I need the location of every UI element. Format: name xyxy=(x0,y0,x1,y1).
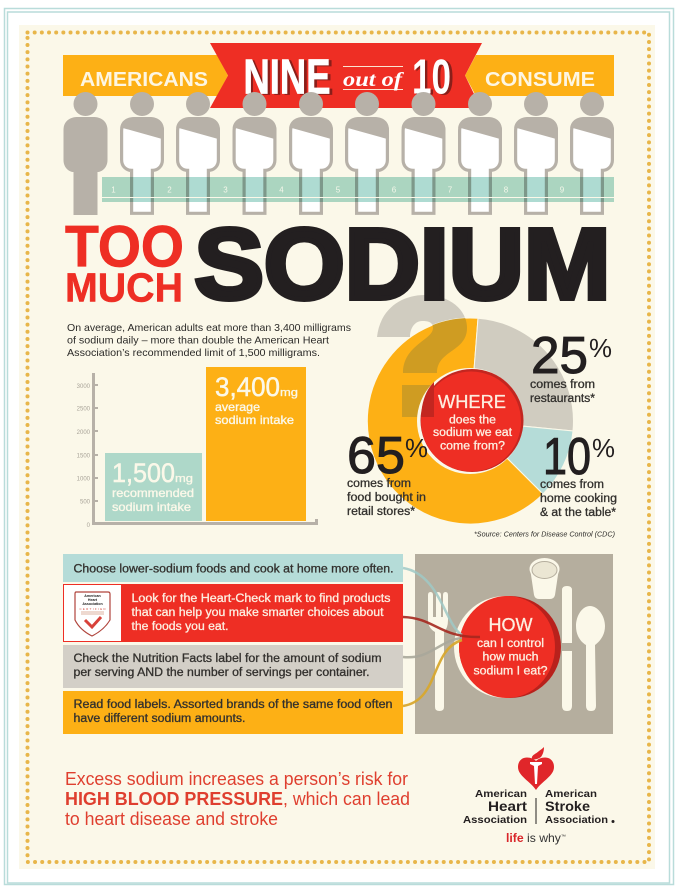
stat: 65 percent: retail stores* xyxy=(347,506,416,518)
banner: nine out of 10: out of xyxy=(343,69,405,91)
icon: spoon xyxy=(576,606,605,711)
warning statement: to heart disease and stroke xyxy=(65,808,278,829)
stat: 25 percent: % xyxy=(589,333,612,363)
bar: recommended: sodium intake xyxy=(112,500,191,514)
bar: average: average xyxy=(215,400,260,414)
number bar 1 to 9: 9 xyxy=(560,186,565,194)
connector lines xyxy=(403,568,480,706)
number bar 1 to 9: 8 xyxy=(504,186,509,194)
stat: 10 percent: comes from xyxy=(540,479,604,491)
center circle: where: does the xyxy=(449,414,496,426)
stat: 25 percent: 25 xyxy=(531,327,588,385)
axis labels: 1000 xyxy=(77,476,91,482)
tip: read food labels: have different sodium amounts. xyxy=(74,713,246,725)
tip: nutrition facts: Check the Nutrition Facts label for the amount of sodium xyxy=(74,653,381,665)
banner: nine out of 10: NINE xyxy=(244,50,330,104)
stat: 10 percent: % xyxy=(592,433,615,463)
stat: 65 percent: food bought in xyxy=(347,492,426,504)
banner: nine out of 10: NINE xyxy=(246,52,334,106)
intro paragraph: of sodium daily – more than double the American Heart xyxy=(67,334,329,346)
logo: american heart and stroke association: ™ xyxy=(561,834,566,840)
banner: nine out of 10: 10 xyxy=(412,50,451,104)
stat: 65 percent: comes from xyxy=(347,478,411,490)
icon: fork xyxy=(428,592,448,711)
warning statement xyxy=(65,768,410,829)
tip: read food labels xyxy=(63,691,403,734)
tip: choose lower sodium xyxy=(63,554,403,582)
banner: consume: CONSUME xyxy=(485,68,595,91)
axis labels: 2000 xyxy=(77,430,91,436)
logo: american heart and stroke association: American xyxy=(475,788,527,800)
center circle: where: come from? xyxy=(440,440,505,452)
tip: nutrition facts xyxy=(63,645,403,688)
logo: american heart and stroke association: American xyxy=(545,788,597,800)
tip: heart-check mark xyxy=(64,584,403,642)
title: too much: TOO xyxy=(65,214,184,280)
how text: sodium I eat? xyxy=(474,666,548,678)
logo: american heart and stroke association: Association xyxy=(463,814,527,826)
logo: american heart and stroke association: Stroke xyxy=(545,798,590,814)
number bar 1 to 9: 2 xyxy=(167,186,172,194)
how text: can I control xyxy=(477,638,544,650)
stat: 65 percent: % xyxy=(405,433,428,463)
number bar 1 to 9: 1 xyxy=(111,186,116,194)
icon: knife xyxy=(561,586,573,711)
banner: Americans: AMERICANS xyxy=(80,68,208,91)
center circle: where: WHERE xyxy=(438,391,506,412)
bar: average xyxy=(206,367,306,521)
icon: heart-check badge: Heart xyxy=(88,598,98,602)
title: too much: MUCH xyxy=(65,264,183,310)
bar: average: sodium intake xyxy=(215,413,294,427)
icon: heart and torch xyxy=(518,747,554,790)
stat: 25 percent: restaurants* xyxy=(530,393,596,405)
tip: choose lower sodium: Choose lower-sodium foods and cook at home more often. xyxy=(74,564,394,576)
tip: nutrition facts: per serving AND the number of servings per container. xyxy=(74,667,370,679)
stat: 10 percent xyxy=(540,428,617,519)
how text: how much xyxy=(482,652,538,664)
axis labels: 0 xyxy=(87,523,91,529)
stat: 65 percent xyxy=(347,427,428,518)
chart axis xyxy=(92,373,318,525)
number bar 1 to 9: 5 xyxy=(336,186,341,194)
slice: home 10 percent xyxy=(470,421,573,494)
center circle: where xyxy=(417,368,524,474)
banner: nine out of 10: 10 xyxy=(414,52,454,106)
stat: 10 percent: 10 xyxy=(543,428,591,486)
axis labels: 2500 xyxy=(77,406,91,412)
how circle xyxy=(454,596,561,698)
axis labels: 500 xyxy=(80,500,91,506)
bar: recommended xyxy=(105,453,202,521)
tip: heart-check mark: that can help you make smarter choices about xyxy=(132,607,384,619)
number bar 1 to 9: 7 xyxy=(448,186,453,194)
number bar 1 to 9 xyxy=(102,177,614,202)
bar: recommended: mg xyxy=(175,473,193,485)
number bar 1 to 9: 4 xyxy=(279,186,284,194)
how text xyxy=(474,614,548,678)
warning statement: HIGH BLOOD PRESSURE xyxy=(65,788,283,809)
intro paragraph: Association’s recommended limit of 1,500 milligrams. xyxy=(67,347,320,359)
title: too much xyxy=(65,214,184,310)
banner: consume xyxy=(465,55,614,96)
question mark overlap xyxy=(402,318,467,417)
icon: heart-check badge: American xyxy=(84,594,101,598)
pictogram: ten people xyxy=(64,92,614,215)
center circle: where: sodium we eat xyxy=(433,427,513,439)
intro paragraph xyxy=(67,322,351,359)
logo: american heart and stroke association: Heart xyxy=(488,798,527,814)
bar: recommended: recommended xyxy=(112,486,194,500)
stat: 10 percent: & at the table* xyxy=(540,507,617,519)
bar: average: 3,400 xyxy=(215,372,280,402)
slice: restaurants 25 percent xyxy=(470,318,573,431)
banner: Americans xyxy=(63,55,228,96)
axis labels: 3000 xyxy=(77,384,91,390)
tip: heart-check mark: the foods you eat. xyxy=(132,621,228,633)
logo: american heart and stroke association: life is why xyxy=(506,831,560,845)
how text: HOW xyxy=(488,614,533,635)
icon: heart-check badge: CERTIFIED xyxy=(80,607,106,611)
slice: retail 65 percent xyxy=(367,318,543,524)
icon: heart-check badge xyxy=(75,592,110,636)
tip: read food labels: Read food labels. Assorted brands of the same food often xyxy=(74,699,392,711)
pie chart xyxy=(368,318,573,524)
tip: heart-check mark: Look for the Heart-Check mark to find products xyxy=(132,593,391,605)
intro paragraph: On average, American adults eat more than 3,400 milligrams xyxy=(67,322,351,334)
question mark behind pie xyxy=(377,295,467,417)
axis labels xyxy=(77,384,91,529)
logo: american heart and stroke association: Association xyxy=(545,814,608,826)
person 1 filled xyxy=(64,92,108,215)
bar: average: mg xyxy=(280,387,298,399)
place setting panel xyxy=(403,554,613,734)
warning statement: Excess sodium increases a person’s risk for xyxy=(65,768,408,789)
icon: heart-check badge: Association xyxy=(82,602,103,606)
stat: 25 percent: comes from xyxy=(530,379,595,391)
stat: 65 percent: 65 xyxy=(347,427,405,485)
number bar 1 to 9: 3 xyxy=(223,186,228,194)
number bar 1 to 9: 6 xyxy=(392,186,397,194)
axis labels: 1500 xyxy=(77,454,91,460)
logo: american heart and stroke association xyxy=(463,747,614,845)
stat: 25 percent xyxy=(530,327,612,405)
source note: *Source: Centers for Disease Control (CDC) xyxy=(474,532,615,538)
banner: nine out of 10 xyxy=(210,43,482,108)
icon: glass xyxy=(530,558,560,599)
title: sodium: SODIUM xyxy=(194,208,610,320)
bar chart xyxy=(77,367,318,529)
warning statement: , which can lead xyxy=(283,788,410,809)
stat: 10 percent: home cooking xyxy=(540,493,617,505)
bar: recommended: 1,500 xyxy=(112,458,175,488)
